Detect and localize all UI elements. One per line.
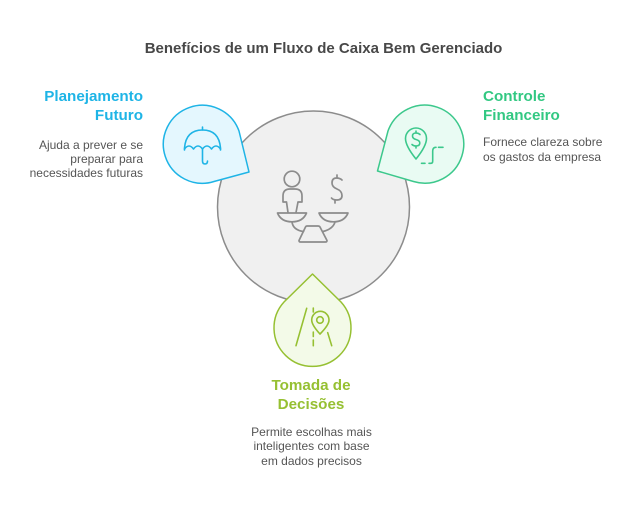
text block: Controle Financeiro description: Fornece clareza sobre bbox=[483, 135, 603, 149]
text block: Tomada de Decisões description: em dados precisos bbox=[261, 454, 362, 468]
icon: dollar location pin with dashed route bbox=[406, 128, 443, 163]
title: Benefícios de um Fluxo de Caixa Bem Gerenciado bbox=[145, 40, 502, 57]
heading: Controle Financeiro: Controle bbox=[483, 88, 545, 105]
text block: Tomada de Decisões description: Permite escolhas mais bbox=[251, 425, 372, 439]
panel: Tomada de Decisões teardrop bbox=[274, 274, 351, 366]
heading: Planejamento Futuro: Futuro bbox=[95, 107, 143, 124]
panel: Controle Financeiro teardrop bbox=[378, 105, 464, 183]
panel: Planejamento Futuro teardrop bbox=[163, 105, 249, 183]
text block: Controle Financeiro description: os gastos da empresa bbox=[483, 150, 601, 164]
text block: Planejamento Futuro description: necessidades futuras bbox=[30, 166, 143, 180]
icon: umbrella bbox=[184, 127, 220, 164]
heading: Tomada de Decisões: Tomada de bbox=[271, 377, 351, 394]
text block: Planejamento Futuro description: preparar para bbox=[70, 152, 143, 166]
heading: Tomada de Decisões: Decisões bbox=[278, 396, 344, 413]
heading: Planejamento Futuro: Planejamento bbox=[44, 88, 143, 105]
text block: Tomada de Decisões description: inteligentes com base bbox=[253, 439, 370, 453]
heading: Controle Financeiro: Financeiro bbox=[483, 107, 560, 124]
text block: Planejamento Futuro description: Ajuda a prever e se bbox=[39, 138, 143, 152]
icon: road with location pin bbox=[296, 308, 332, 346]
icon: person and dollar on scale bbox=[278, 171, 348, 242]
central circle bbox=[218, 111, 410, 303]
